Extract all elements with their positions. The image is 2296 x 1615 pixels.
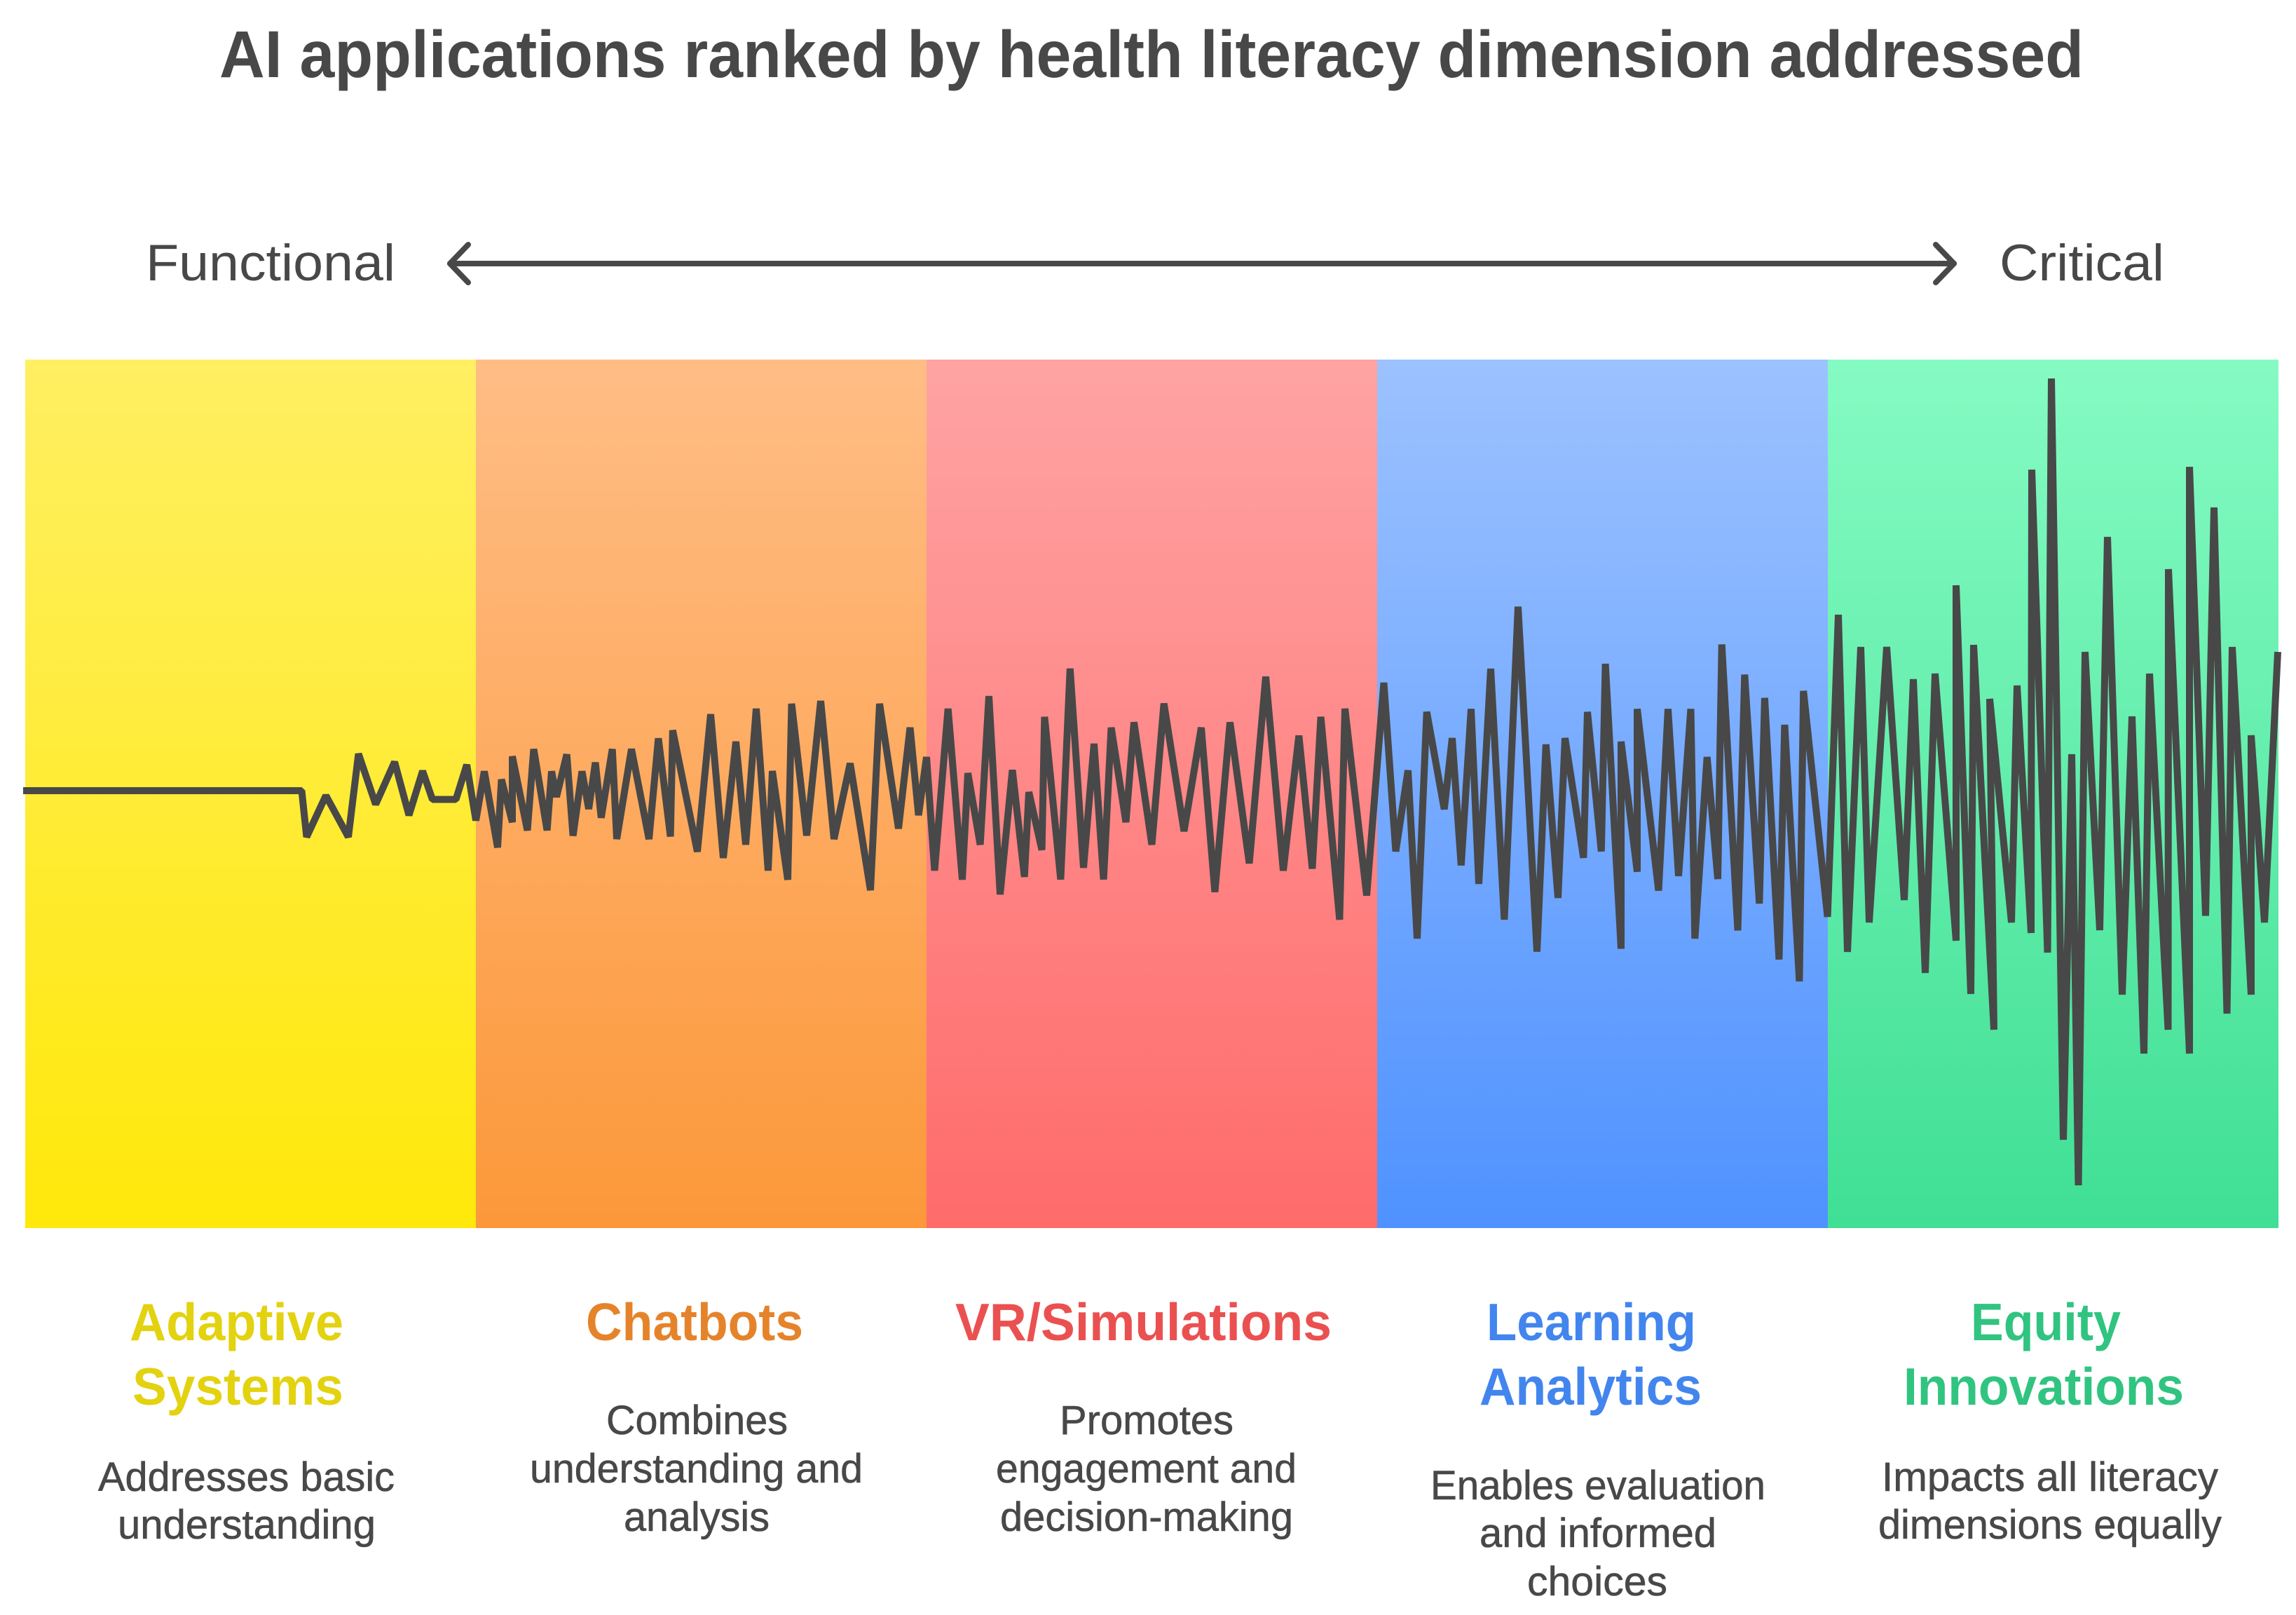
panel: VR/Simulations band — [927, 360, 1377, 1228]
description: VR/Simulations: decision-making — [1000, 1494, 1293, 1540]
panel: Chatbots band — [476, 360, 927, 1228]
heading: Learning Analytics: Analytics — [1480, 1357, 1702, 1416]
heading: Adaptive Systems: Systems — [132, 1357, 343, 1416]
description: Equity Innovations — [1878, 1454, 2222, 1548]
axis: Functional to Critical — [146, 235, 2164, 292]
column: VR/Simulations — [955, 1293, 1332, 1540]
description: VR/Simulations: Promotes — [1060, 1398, 1234, 1443]
heading: Adaptive Systems — [130, 1293, 343, 1416]
description: Learning Analytics: Enables evaluation — [1430, 1463, 1765, 1508]
column: Adaptive Systems — [98, 1293, 395, 1548]
heading: Chatbots: Chatbots — [586, 1293, 803, 1351]
description: Chatbots: analysis — [624, 1494, 770, 1540]
description: Equity Innovations: dimensions equally — [1878, 1502, 2222, 1548]
title: AI applications ranked by health literacy dimension addressed — [219, 18, 2084, 92]
description: Chatbots: understanding and — [530, 1446, 863, 1492]
heading: Equity Innovations — [1904, 1293, 2184, 1416]
heading: Equity Innovations: Equity — [1971, 1293, 2121, 1351]
panel: Adaptive Systems band — [25, 360, 476, 1228]
panel: Learning Analytics band — [1377, 360, 1828, 1228]
axis label: Critical: Critical — [2000, 235, 2164, 292]
description: VR/Simulations — [996, 1398, 1297, 1540]
column: Chatbots — [530, 1293, 863, 1540]
description: Learning Analytics: choices — [1527, 1559, 1667, 1604]
description: Learning Analytics — [1430, 1463, 1765, 1604]
heading: Learning Analytics: Learning — [1487, 1293, 1696, 1351]
description: Equity Innovations: Impacts all literacy — [1882, 1454, 2218, 1500]
heading: Adaptive Systems: Adaptive — [130, 1293, 343, 1351]
description: Chatbots — [530, 1398, 863, 1540]
description: Adaptive Systems — [98, 1454, 395, 1548]
double-headed arrow — [450, 245, 1954, 282]
description: Chatbots: Combines — [606, 1398, 788, 1443]
panel: Equity Innovations band — [1828, 360, 2278, 1228]
axis label: Functional: Functional — [146, 235, 395, 292]
column: Learning Analytics — [1430, 1293, 1765, 1604]
heading: VR/Simulations: VR/Simulations — [955, 1293, 1332, 1351]
column: Equity Innovations — [1878, 1293, 2222, 1548]
heading: Equity Innovations: Innovations — [1904, 1357, 2184, 1416]
description: Learning Analytics: and informed — [1480, 1511, 1716, 1556]
heading: Learning Analytics — [1480, 1293, 1702, 1416]
gradient band panels — [25, 360, 2278, 1228]
description: VR/Simulations: engagement and — [996, 1446, 1297, 1492]
description: Adaptive Systems: understanding — [118, 1502, 376, 1548]
description: Adaptive Systems: Addresses basic — [98, 1454, 395, 1500]
waveform line growing in amplitude — [23, 379, 2278, 1185]
